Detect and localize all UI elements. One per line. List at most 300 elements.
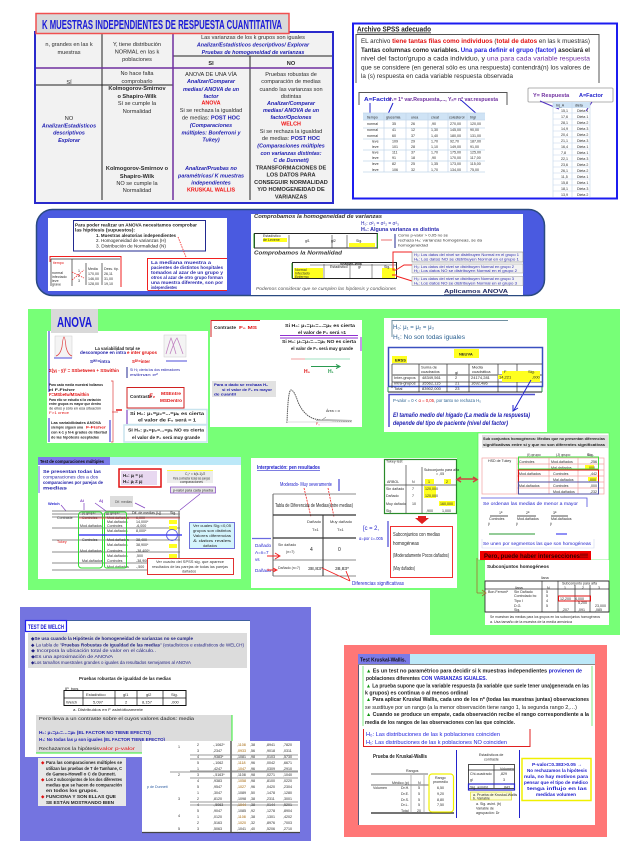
- text: notes on comparisons: ◆: [41, 794, 45, 799]
- text: large samples no: descriptivos: [53, 130, 85, 136]
- callout: unequal means case: Si H₀: μ₁=μ₂=...=μₖ NO es cierta: [128, 428, 205, 432]
- table: wide data: 117,00: [470, 156, 481, 160]
- table: comparisons: ,1108: [237, 815, 246, 819]
- label: data left: Dañado: [255, 568, 272, 573]
- table: comparisons: ,98: [250, 773, 255, 777]
- arrow: levene result: [381, 239, 392, 241]
- heading: interpretation: Interpretación: pen resultados: [257, 465, 320, 471]
- panel: checking assumptions: [251, 214, 523, 295]
- panel: kruskal: [344, 645, 607, 837]
- table: comparisons: ,3001: [283, 797, 292, 801]
- table: kruskal statistic: Estadísticos de: [479, 753, 503, 757]
- table: long data: 26,1: [561, 169, 568, 173]
- text: anova intro: La variabilidad total se: [95, 346, 141, 351]
- table: levene: gl2: [331, 239, 336, 243]
- table: comparisons: ,5201: [283, 803, 292, 807]
- text: anova branch: KRUSKAL WALLIS: [187, 188, 235, 194]
- table: anova: Suma de: [421, 364, 438, 370]
- table: post hoc: Controles: [107, 559, 123, 563]
- table: comparisons: ,0311: [283, 749, 292, 753]
- table: tukey groups: Mod.dañados: [553, 490, 575, 494]
- table: comparisons: ,0103: [266, 755, 275, 759]
- table: wide data: 35: [392, 122, 396, 126]
- table: welch: [64, 690, 186, 706]
- table: comparisons: ,0933: [237, 749, 246, 753]
- callout: f statistic: F₀: [149, 394, 156, 400]
- table: anova: gl: [455, 370, 458, 375]
- table: post hoc: Mod.dañados: [107, 565, 129, 569]
- table: wide data: 92,70: [450, 140, 459, 144]
- table: tukey groups: Controles: [553, 484, 569, 488]
- text: anova branch: factor: [204, 94, 219, 100]
- note: pairs: comparaciones: [180, 480, 203, 484]
- text: large samples no: [41, 116, 96, 144]
- table: comparisons: ,1108: [237, 773, 246, 777]
- table: comparisons: ,8120: [213, 797, 222, 801]
- text: normal theory: siempre siguen una: [51, 424, 84, 430]
- table: anova: 23: [455, 386, 460, 391]
- table: anova: 35562,115: [422, 380, 441, 386]
- table: wide data: 170,00: [450, 156, 461, 160]
- table: long data: Dieta 1: [577, 115, 588, 119]
- table: differences: 0: [338, 547, 341, 553]
- table: ranks: Médico (p): [392, 781, 409, 785]
- table: data: [50, 256, 121, 287]
- callout: significance: Valores diferencias: [193, 534, 231, 538]
- text: notes on comparisons: ◆: [41, 760, 45, 765]
- callout: homogeneous subsets: [388, 521, 452, 578]
- panel: multiple comparisons: [38, 457, 241, 579]
- table: ranks: 6,50: [437, 786, 444, 790]
- text: header note: [482, 435, 608, 448]
- text: kruskal explanation: poblaciones diferentes CON VARIANZAS IGUALES.: [366, 676, 487, 682]
- table: welch: Welch: [66, 700, 77, 704]
- table: tukey groups: Sig.: [587, 453, 594, 457]
- table: comparisons: ,98: [250, 755, 255, 759]
- callout: independence: una muestra diferente, son por: [151, 280, 223, 286]
- table: homogeneous: ARBOL: [387, 480, 399, 484]
- label: a: Ai: [80, 498, 84, 503]
- table: comparisons: ,2910: [283, 767, 292, 771]
- text: file explanation: la (s) respuesta en cada variable respuesta observada: [361, 73, 513, 80]
- text: robust branch: Analizar/Comparar: [266, 101, 316, 107]
- callouts: normality results: H₁: Los datos NO se distribuyen Normal en el grupo 3: [414, 280, 517, 286]
- text: large samples no: Analizar/Estadísticos: [41, 124, 96, 130]
- text: file explanation: que se considere (en general sólo es una respuesta) contendrá(n) los valores de: [361, 64, 590, 72]
- callouts: normality results: H₁: Los datos NO se distribuyen Normal en el grupo 1: [414, 256, 519, 262]
- highlights: groups: [78, 512, 182, 568]
- callouts: normality results: H₀: Los datos del nivel se distribuyen Normal en grupo 3: [414, 276, 514, 281]
- text: kruskal explanation: ▲ La prueba supone que la variable respuesta (la variable que suele tener una)generada en las: [366, 684, 589, 690]
- label: dep var: IP_typs: [65, 686, 78, 691]
- text: kruskal explanation: ▲ Es un test no paramétrico para decidir si k muestras independientes provienen de: [366, 668, 582, 674]
- table: long data: Dieta 1: [577, 181, 588, 185]
- table: comparisons: 4: [197, 755, 199, 759]
- callout: variables: [359, 92, 507, 105]
- table: homogeneous: Dañado: [386, 494, 399, 498]
- table: comparisons: 5: [197, 761, 199, 765]
- table: comparisons: ,0120: [213, 815, 222, 819]
- callout: p-value conclusion: tenga influjo en las: [527, 786, 587, 792]
- callout: independence: pacientes de distintos hospitales: [151, 265, 223, 271]
- table: data: 26,11: [104, 272, 113, 276]
- text: normality tests: Normalidad: [123, 109, 151, 115]
- table: comparisons: ,8941: [266, 743, 275, 747]
- table: comparisons: ,0420: [266, 785, 275, 789]
- table: kruskal statistic: 3: [503, 778, 505, 782]
- table: differences: Muy dañado: [330, 519, 353, 524]
- divider: purple: [280, 336, 358, 338]
- arrow: h1 direction: [311, 364, 340, 368]
- table: subsets: Sin Dañado: [514, 590, 533, 594]
- callout: significance: grupos son distintos: [193, 529, 231, 533]
- table: wide data: 32: [411, 168, 415, 172]
- table: comparisons: -,1062*: [213, 743, 225, 747]
- table: comparisons: 1: [197, 767, 199, 771]
- text: anova branch: (Comparaciones: [190, 123, 232, 129]
- text: kruskal explanation: se sustituye por un rango (a la menor observación tiene rango 1, la segunda rango 2,…): [365, 705, 577, 711]
- callout: p-value conclusion: pensar que el tipo de médico: [524, 780, 588, 786]
- text: anova branch: Analizar/Pruebas no: [184, 166, 238, 172]
- table: wide data: leve: [372, 140, 379, 144]
- text: if h0 false: Si H₀: μ₁=μ₂=...=μₖ NO es cierta: [282, 339, 356, 344]
- text: notes on comparisons: SE ESTÁN MOSTRANDO BIEN: [46, 800, 114, 805]
- text: if h0 false: [282, 337, 361, 351]
- table: homogeneous: Sin dañado: [386, 487, 404, 491]
- heading: variances: Pruebas de homogeneidad de varianzas: [202, 50, 304, 56]
- text: robust branch: medias/ ANOVA de un: [263, 108, 320, 114]
- table: comparisons: ,5163: [213, 821, 222, 825]
- table: post hoc: 6,000: [136, 516, 145, 520]
- table: comparisons: ,2347: [213, 749, 222, 753]
- text: hypothesis test: Pero lleva a un contraste sobre el cuyos valores dados: media: [39, 716, 195, 721]
- heading: homogeneous subsets: Subconjuntos homogéneos: [487, 564, 549, 569]
- panel: interpretation: [251, 458, 459, 588]
- table: levene: Sig.: [356, 239, 362, 243]
- table: wide data: colesterol: [449, 116, 465, 120]
- text: conclusion note: Podemos considerar que se cumplen las hipótesis y condiciones: [256, 286, 397, 291]
- text: anova branch: ANOVA: [201, 100, 221, 106]
- table: comparisons: ,1089: [237, 791, 246, 795]
- table: post hoc: Tukey: [57, 540, 67, 544]
- text: large samples no: Explorar: [58, 138, 81, 144]
- heading: kruskal: [358, 654, 595, 664]
- table: long data: Dieta 3: [577, 139, 588, 143]
- table: long data: 28,1: [561, 121, 568, 125]
- text: statistic explanation: Para ello se estudia si la variación: [49, 397, 102, 402]
- label: data left: Dañado: [255, 543, 272, 548]
- callout: f statistic: MSDentro: [160, 398, 182, 403]
- table: comparisons: -,5063: [213, 803, 223, 807]
- table: ranks: Rango: [435, 776, 446, 780]
- note: p-value: p-valor para cada prueba: [173, 488, 214, 492]
- table: wide data: 180,00: [450, 134, 461, 138]
- table: post hoc: Dif. de medias (i-j): [132, 511, 161, 515]
- table: ranks: 5: [418, 803, 420, 807]
- table: homogeneous: 7: [412, 487, 414, 491]
- table: comparisons: ,3047: [213, 791, 222, 795]
- table: tukey groups: Mal.dañados: [553, 478, 574, 482]
- table: comparisons: ,92: [250, 809, 255, 813]
- table: wide data: 115,00: [470, 162, 481, 166]
- table: post hoc: Mal.dañados: [107, 543, 128, 547]
- table: post hoc: Mod.dañados: [80, 549, 102, 553]
- text: file explanation: Tantas columnas como variables. Una para definir el grupo (factor) asociará el: [361, 47, 590, 54]
- table: homogeneous: ,900: [426, 509, 433, 513]
- table: ranks: promedio: [433, 780, 448, 784]
- table: levene: de Levene: [263, 238, 280, 242]
- text: welch bullets: ◆Se usa cuando la Hipótesis de homogeneidad de varianzas no se cumple: [30, 636, 193, 641]
- table: comparisons: ,4202: [283, 815, 292, 819]
- table: homogeneous: 1: [428, 480, 430, 484]
- table: tukey groups: Mal.dañados: [551, 466, 572, 470]
- table: long data: Dieta 2: [577, 163, 588, 167]
- table: subsets: 5: [546, 590, 548, 594]
- table: anova: 2: [455, 375, 458, 380]
- text: kruskal explanation: ▲ Cuando se produce un empate, cada observación recibe el rango correspondiente a la: [366, 712, 590, 718]
- text: robust branch: VARIANZAS: [275, 194, 307, 200]
- table: wide data: 187,00: [470, 140, 481, 144]
- table: shapiro: Sig.: [384, 265, 390, 269]
- formulas: ordered means: Mod.dañados: [517, 517, 539, 521]
- text: order means: [481, 498, 587, 507]
- text: large samples no: NO: [65, 116, 74, 122]
- text: robust branch: CONSEGUIR NORMALIDAD: [254, 180, 328, 186]
- callout: response and factor: [528, 88, 613, 102]
- table: post hoc: Mal.dañados: [107, 529, 128, 533]
- table: wide data: 120,00: [470, 122, 481, 126]
- table: anova: 21: [455, 380, 460, 386]
- table: wide data: 18: [411, 156, 415, 160]
- table: welch: 5,097: [93, 700, 104, 704]
- table: long data: 21,1: [561, 139, 568, 143]
- table: wide data: 173,00: [450, 162, 461, 166]
- table: long data: 11,5: [561, 175, 568, 179]
- text: statistic explanation: entre grupos es mayor que dentro: [49, 401, 102, 406]
- text: normality tests: Shapiro-Wilk: [120, 174, 155, 180]
- text: normality tests: Kolmogorov-Smirnov o: [106, 166, 169, 172]
- text: post hoc explanation: comparaciones dos a dos: [43, 474, 99, 480]
- text: notes on comparisons: utilizan las pruebas de T de Tamhane, C: [46, 766, 122, 771]
- table: wide data: normal: [367, 128, 378, 132]
- table: differences: 38,83*: [308, 566, 323, 571]
- table: anova: F: [504, 369, 507, 374]
- table: comparisons: 2: [197, 821, 199, 825]
- text: if h0 false: el valor de F₀ será muy grande: [291, 346, 353, 351]
- table: homogeneous: N: [412, 480, 415, 484]
- table: differences: Tx1: [337, 527, 344, 532]
- table: kruskal statistic: gl: [470, 778, 473, 782]
- callout: note: dañados: [182, 570, 196, 574]
- text: kruskal explanation: media de los rangos de las observaciones con las que coincide.: [365, 720, 515, 726]
- table: comparisons: ,9018: [266, 749, 275, 753]
- table: wide data: 26: [411, 122, 415, 126]
- table: tukey groups: Mod.dañados: [519, 472, 541, 476]
- text: normality tests: Sí se cumple la: [118, 101, 157, 107]
- text: normal theory: F-Fisher: [86, 424, 107, 430]
- table: long data: dieta: [575, 104, 583, 108]
- table: post hoc: -38,900*: [136, 559, 150, 563]
- table: ranks: Dr.E.: [401, 792, 409, 796]
- table: wide data: 12: [411, 128, 415, 132]
- table: post hoc: (j) grupo: [106, 511, 119, 515]
- table: wide data: ,90: [431, 122, 436, 126]
- text: conclusion: P-valor = 0 < α = 0,05, por tanto se rechaza H₀: [393, 398, 481, 403]
- text: robust branch: Si se rechaza la igualdad: [260, 129, 322, 135]
- text: robust branch: [254, 72, 328, 200]
- note: decision rule: si el valor de F₀ es mayor: [222, 388, 273, 392]
- table: tukey groups: Mal.dañados: [519, 484, 540, 488]
- heading: variances: [196, 35, 310, 56]
- table: tukey groups: (I) grupo: [527, 453, 541, 457]
- table: data: tiempo: [53, 261, 64, 265]
- table: long data: 15,1: [561, 109, 568, 113]
- arrows: response and factor: [540, 101, 592, 111]
- text: anova branch: ANOVA DE UNA VÍA: [185, 71, 237, 78]
- table: post hoc: 8,000*: [136, 529, 147, 533]
- table: subsets: ,091: [578, 608, 585, 612]
- arrows: labels to table: [61, 494, 200, 511]
- callout: p-value conclusion: P-valor=0.383>0.05 →: [532, 762, 582, 768]
- table: kruskal statistic: Sig. asintót.: [470, 786, 489, 790]
- text: statistic explanation: [49, 382, 103, 415]
- heading: normality column: Y, tiene distribución: [113, 42, 161, 48]
- table: differences: Sin dañado: [278, 543, 296, 547]
- text: file explanation: [356, 34, 599, 83]
- table: anova: 14,221: [499, 374, 512, 380]
- table: homogeneous: 7: [412, 494, 414, 498]
- callout: f0 formula: [211, 320, 260, 337]
- table: comparisons: ,38: [250, 797, 255, 801]
- callout: hypothesis: H₀: μᵢ = μⱼ: [123, 472, 143, 478]
- table: subsets: Bon.Ferroni*: [488, 590, 509, 594]
- table: post hoc: 38,900*: [136, 543, 149, 547]
- table: subsets: 5: [546, 594, 548, 598]
- text: file explanation: EL archivo tiene tantas filas como individuos (total de datos en las k muestras): [361, 38, 590, 45]
- table: subsets: ,207: [562, 608, 569, 612]
- callout: independence: [148, 258, 227, 291]
- table: comparisons: ,1027: [237, 785, 246, 789]
- table: tukey groups: (J) grupo: [556, 453, 570, 457]
- table: long data: Dieta 3: [577, 127, 588, 131]
- callout: homogeneous subsets: Subconjuntos con medias: [393, 532, 440, 538]
- callout: f statistic: [127, 388, 184, 408]
- text: large samples yes: SÍ: [66, 79, 72, 86]
- table: anova: Intra-grupos: [394, 380, 416, 386]
- table: wide data: 1,70: [431, 140, 438, 144]
- table: wide data: 145,00: [450, 128, 461, 132]
- heading: normality column: poblaciones: [122, 57, 152, 63]
- note: decision rule: [212, 381, 276, 397]
- callout: homogeneous subsets: (Moderadamente Pocos dañados): [393, 553, 449, 559]
- table: comparisons: 3: [197, 827, 199, 831]
- table: comparisons: ,2311: [266, 797, 275, 801]
- table: subsets: 4: [546, 599, 548, 603]
- table: wide data: 175,00: [450, 150, 461, 154]
- table: differences: Tabla de Diferencias de Medias(entre medias): [275, 503, 353, 509]
- text: hypothesis test: [36, 715, 232, 753]
- text: kruskal hypotheses: H₀: Las distribuciones de las k poblaciones coinciden: [366, 732, 500, 738]
- note: decision rule: Para α dado se rechaza H₀: [214, 383, 268, 387]
- note: grouping: Variable de: [476, 806, 494, 810]
- table: comparisons: ,7003: [283, 821, 292, 825]
- heading: welch: TEST DE WELCH: [28, 624, 64, 631]
- table: wide data: leve: [372, 150, 379, 154]
- table: differences: 4: [310, 547, 313, 553]
- table: anova: Media: [472, 364, 484, 370]
- formulas: ordered means: ȳ: [488, 522, 490, 526]
- table: wide data: leve: [372, 145, 379, 149]
- text: normality tests: Normalidad: [123, 188, 151, 194]
- table: ranks: 9,20: [437, 792, 444, 796]
- table: comparisons: 5: [197, 809, 199, 813]
- icon: equals sign: [116, 409, 122, 411]
- table: post hoc: -,500: [136, 565, 144, 569]
- text: normal theory: con k-1 y N-k grados de libertad: [51, 430, 108, 434]
- panel: anova assumptions: [36, 210, 544, 296]
- table: anova: NEUVA: [459, 352, 473, 356]
- table: wide data: normal: [367, 122, 378, 126]
- text: anova intro: descompone en intra: [80, 350, 127, 355]
- heading: kruskal: Test Kruskal-Wallis.: [360, 658, 406, 664]
- table: differences: [273, 494, 356, 576]
- callout: note: Ver cuadro del SPSS sig. que aparece: [156, 560, 224, 564]
- table: long data: 17,6: [561, 115, 568, 119]
- formulas: ordered means: 3ª: [553, 511, 557, 515]
- table: wide data: 111: [392, 150, 397, 154]
- note: grouping: a. Sig. asint. (b): [476, 802, 501, 806]
- text: conditions of application: 3. Distribución de Normalidad (N): [96, 244, 167, 248]
- formula: alpha: [359, 526, 383, 542]
- table: wide data: 37: [411, 150, 415, 154]
- table: comparisons: 2: [178, 773, 180, 777]
- table: long data: 22,1: [561, 157, 568, 161]
- text: conditions of application: 1. Muestras aleatorias independientes: [96, 233, 177, 238]
- table: post hoc: Mal.dañados: [107, 520, 128, 524]
- formulas: ordered means: Mal.dañados: [551, 517, 572, 521]
- table: long data: Dieta 3: [577, 157, 588, 161]
- table: homogeneous: 160,000: [440, 502, 453, 506]
- text: post hoc explanation: Se presentan todas las: [43, 469, 102, 474]
- table: comparisons: ,9547: [213, 785, 222, 789]
- table: wide data: 91,00: [470, 145, 479, 149]
- text: conclusion: depende del tipo de paciente (nivel del factor): [393, 420, 508, 427]
- text: anova intro: [80, 346, 158, 355]
- table: data: 31,00: [104, 277, 113, 281]
- table: shapiro: Normal: [295, 268, 307, 272]
- table: tukey groups: ,232: [590, 490, 597, 494]
- heading: sample size column: muestras: [57, 50, 81, 56]
- text: anova branch: paramétricas/ K muestras: [177, 174, 244, 180]
- table: subsets: D.G.: [514, 604, 521, 608]
- table: wide data: 134,00: [450, 168, 461, 172]
- text: notes on comparisons: medias que se hacen de comparación: [46, 782, 122, 788]
- table: long data: Inj_A: [556, 104, 565, 108]
- formulas: ordered means: ȳ: [516, 522, 518, 526]
- text: welch bullets: ◆ Incorpora la ubicación total de valor en el cálculo..: [31, 648, 156, 653]
- arrow: table to text: [72, 270, 84, 280]
- callout: f0 formula: Contraste: [214, 325, 237, 330]
- bracket: summary: [111, 381, 118, 442]
- table: differences: Dañado (n=7): [278, 566, 300, 570]
- table: post hoc: Mod.dañados: [80, 524, 102, 528]
- label: h0: H₀: [304, 369, 310, 375]
- text: notes on comparisons: FUNCIONA Y SON ELLAS QUE: [46, 794, 116, 799]
- table: anova: Sig.: [528, 369, 535, 374]
- table: wide data: 60: [392, 134, 396, 138]
- table: wide data: 28: [411, 145, 415, 149]
- heading: anova: ANOVA: [57, 314, 92, 331]
